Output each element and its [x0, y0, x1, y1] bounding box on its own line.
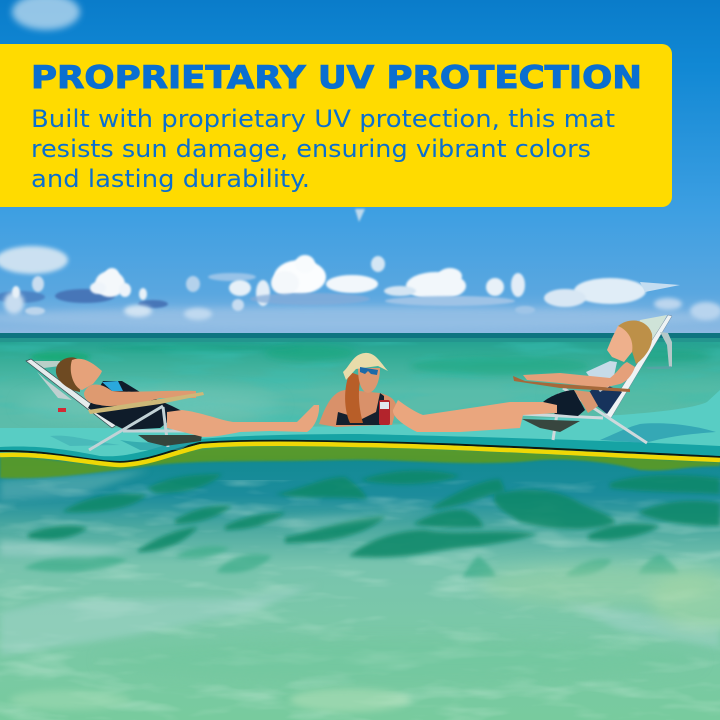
banner heading: PROPRIETARY UV PROTECTION [31, 60, 642, 96]
legs [167, 405, 319, 437]
legs [393, 400, 557, 432]
thigh [574, 390, 598, 413]
chair frame [522, 388, 647, 443]
mat shadow [600, 423, 716, 443]
banner body text [31, 105, 615, 193]
swimsuit [585, 382, 622, 414]
yellow banner [0, 44, 672, 207]
lighter wave patches [23, 546, 678, 577]
banner body text: Built with proprietary UV protection, this mat [31, 105, 615, 133]
sea background [0, 333, 720, 720]
banner body text: and lasting durability. [31, 165, 310, 193]
hair [56, 357, 80, 392]
mat reflection [0, 445, 720, 478]
left woman on lounge chair [26, 357, 319, 450]
armrest [88, 392, 204, 414]
chair back and headrest [636, 315, 667, 342]
banner body text: resists sun damage, ensuring vibrant colors [31, 135, 591, 163]
mat black and yellow stripes [0, 441, 720, 462]
sunglasses [360, 367, 378, 375]
chair frame [89, 406, 202, 450]
right woman on lounge chair [393, 315, 672, 443]
drink can [379, 400, 390, 425]
mat front edge [0, 434, 720, 462]
swimsuit [336, 393, 384, 425]
sky background [0, 0, 720, 334]
mat top surface [0, 390, 720, 462]
floating water mat [0, 390, 720, 478]
middle woman with sun hat [319, 353, 396, 427]
hat [343, 353, 388, 380]
long hair [345, 372, 363, 423]
dark wave patches [28, 470, 720, 557]
arms and shoulders [319, 390, 396, 427]
head [607, 326, 632, 362]
arm [523, 362, 635, 388]
armrest [513, 376, 630, 392]
red marker [58, 408, 66, 412]
clouds on the horizon [0, 246, 720, 329]
torso and arm [84, 384, 196, 406]
hair [618, 320, 652, 364]
chair back [26, 359, 118, 428]
face [358, 368, 380, 393]
swimsuit [88, 381, 182, 430]
pale water streaks [0, 470, 720, 656]
head [71, 359, 102, 390]
